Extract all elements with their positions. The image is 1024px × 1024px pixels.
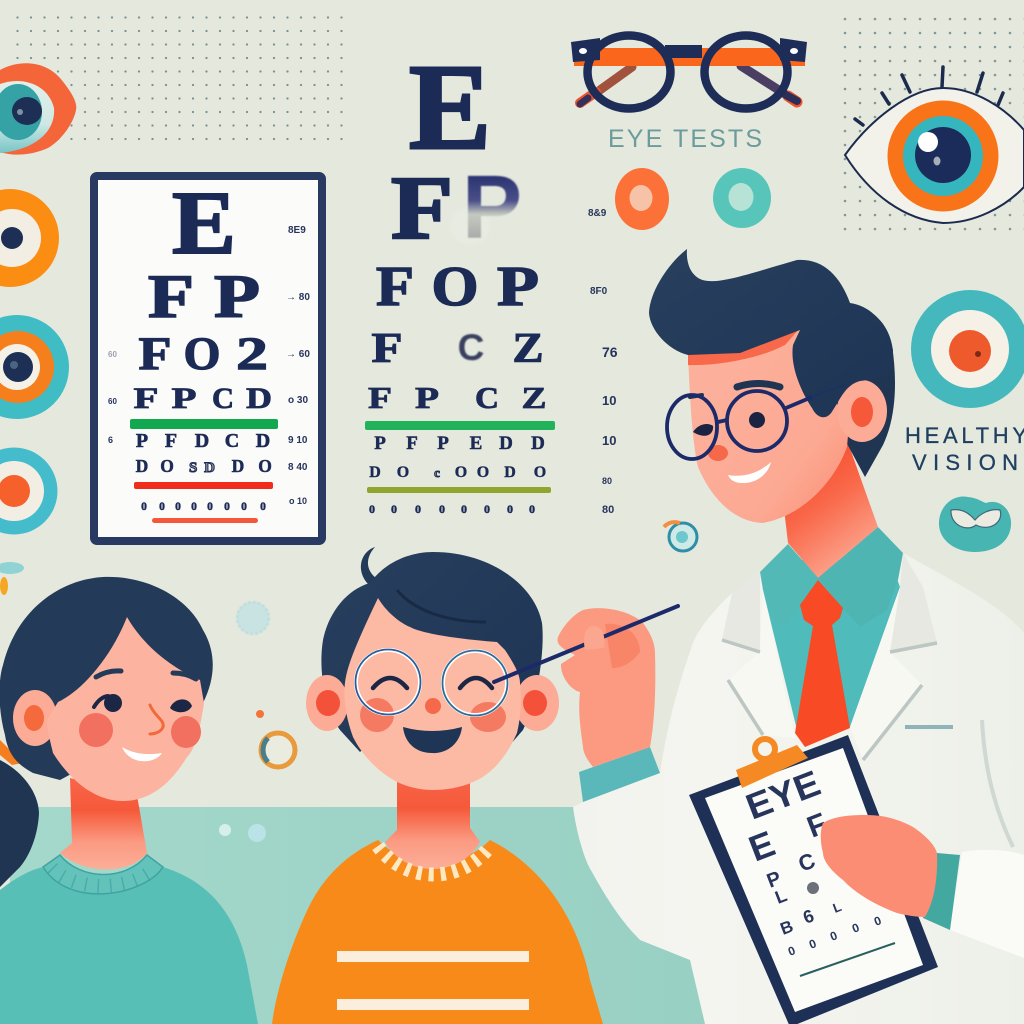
panel: eye chart on wall: C — [212, 382, 234, 415]
girl sweater — [0, 867, 258, 1024]
boy nose — [425, 698, 441, 714]
panel: free-standing eye chart: F — [406, 433, 418, 454]
boy hair sweep — [397, 590, 486, 622]
doctor back hair — [800, 305, 895, 477]
panel: free-standing eye chart: 8F0 — [590, 286, 608, 297]
panel: free-standing eye chart: 76 — [602, 344, 618, 360]
panel: free-standing eye chart: 0 — [507, 502, 513, 516]
doctor right hand — [821, 815, 937, 917]
icon: teal ring eye — [0, 315, 69, 419]
icon: small drops — [219, 824, 266, 842]
doctor pocket — [905, 725, 953, 729]
boy glasses — [356, 650, 508, 716]
clipboard text: P — [764, 867, 784, 893]
panel: free-standing eye chart: P — [437, 433, 449, 454]
panel: free-standing eye chart: E — [409, 40, 491, 175]
clipboard text — [740, 762, 884, 959]
panel: eye chart on wall: o 30 — [288, 395, 308, 406]
panel: free-standing eye chart: 0 — [369, 502, 375, 516]
icon: small orange spark — [256, 710, 264, 718]
panel: eye chart on wall: 0 — [207, 501, 213, 513]
icon: eye top left — [0, 63, 76, 155]
clipboard text: EYE — [740, 762, 826, 827]
girl ear — [13, 690, 57, 746]
doctor neck — [783, 440, 878, 578]
panel: eye chart on wall: SD — [189, 460, 215, 476]
boy hair curl — [361, 547, 376, 586]
panel: eye chart on wall: D — [256, 430, 270, 452]
clipboard text: 0 — [872, 913, 884, 929]
panel: eye chart on wall: 60 — [108, 350, 117, 359]
thumb — [584, 626, 605, 650]
panel: free-standing eye chart: F — [391, 159, 453, 258]
panel: eye chart on wall: 0 — [260, 501, 266, 513]
doctor face — [688, 310, 850, 523]
icon: side sparks — [0, 562, 24, 595]
icon: orange dot — [615, 168, 669, 230]
panel: free-standing eye chart: Z — [522, 380, 546, 415]
pointer stick — [494, 606, 678, 682]
doctor ear — [837, 380, 887, 442]
panel: free-standing eye chart: 0 — [484, 502, 490, 516]
doctor smile — [728, 462, 771, 483]
panel: free-standing eye chart: 0 — [391, 502, 397, 516]
panel: eye chart on wall: P — [136, 430, 148, 452]
panel: eye chart on wall: 0 — [241, 501, 247, 513]
panel: eye chart on wall: P — [172, 382, 196, 415]
boy collar — [378, 846, 490, 874]
panel: free-standing eye chart: 10 — [602, 393, 616, 408]
panel: free-standing eye chart: P — [497, 256, 539, 318]
panel: free-standing eye chart: C — [475, 380, 499, 415]
heading: healthy vision — [905, 423, 1024, 475]
girl smile — [122, 747, 162, 761]
doctor collar — [760, 527, 903, 627]
hand shading — [605, 624, 640, 668]
panel: free-standing eye chart: F — [376, 256, 414, 318]
panel: free-standing eye chart — [365, 40, 618, 516]
panel: free-standing eye chart: D — [369, 464, 381, 481]
doctor eyebrows — [690, 384, 780, 397]
panel: eye chart on wall: 6 — [108, 435, 113, 445]
girl hair tie — [0, 740, 23, 765]
panel: free-standing eye chart: 80 — [602, 504, 614, 516]
clipboard text: L — [772, 885, 790, 908]
boy hair — [321, 552, 543, 753]
panel: eye chart on wall: 2 — [236, 328, 268, 380]
panel: eye chart on wall — [94, 174, 322, 541]
panel: free-standing eye chart: Z — [512, 326, 544, 372]
panel: free-standing eye chart: 0 — [529, 502, 535, 516]
clipboard text: 0 — [850, 920, 862, 936]
panel: eye chart on wall: → 60 — [286, 349, 310, 360]
panel: free-standing eye chart: O — [477, 464, 489, 481]
girl neck — [60, 778, 147, 870]
panel: free-standing eye chart: C — [458, 327, 484, 368]
panel: free-standing eye chart: 80 — [602, 476, 612, 486]
panel: eye chart on wall: 60 — [108, 397, 117, 406]
doctor coat seams — [982, 720, 1013, 847]
floor — [10, 807, 710, 1024]
panel: eye chart on wall: 8 40 — [288, 462, 308, 473]
clipboard text: 0 — [807, 936, 819, 952]
panel: eye chart on wall: 0 — [141, 501, 147, 513]
panel: eye chart on wall: 0 — [159, 501, 165, 513]
girl collar — [43, 855, 163, 894]
girl nose — [150, 705, 163, 734]
doctor forehead shade — [688, 328, 800, 365]
girl blush — [79, 713, 201, 748]
clipboard text: 6 — [800, 905, 817, 928]
icon: ring — [261, 733, 295, 767]
figure: doctor — [573, 249, 1024, 1024]
panel: free-standing eye chart: O — [397, 464, 409, 481]
panel: free-standing eye chart: D — [504, 464, 516, 481]
panel: eye chart on wall: 0 — [191, 501, 197, 513]
panel: free-standing eye chart: D — [499, 433, 513, 454]
clipboard text: C — [795, 848, 819, 877]
panel: free-standing eye chart: P — [415, 380, 439, 415]
panel: eye chart on wall: E — [172, 174, 236, 273]
icon: healthy vision eye — [911, 290, 1024, 408]
doctor nose — [708, 445, 728, 461]
girl ponytail — [0, 760, 39, 887]
panel: eye chart on wall: F — [165, 430, 177, 452]
panel: eye chart on wall: D — [246, 382, 272, 415]
doctor right cuff — [923, 853, 960, 930]
icon: large eye top right — [845, 67, 1024, 223]
panel: eye chart on wall: 0 — [175, 501, 181, 513]
clipboard — [689, 735, 938, 1024]
panel: free-standing eye chart: O — [534, 464, 546, 481]
doctor right sleeve — [950, 850, 1024, 958]
panel: free-standing eye chart: E — [470, 433, 482, 454]
panel: eye chart on wall: C — [225, 430, 239, 452]
panel: eye chart on wall: F — [134, 382, 158, 415]
girl eyebrows — [96, 671, 196, 679]
panel: eye chart on wall: D — [195, 430, 209, 452]
panel: eye chart on wall: o 10 — [289, 496, 307, 506]
clipboard text: 0 — [828, 928, 840, 944]
panel: eye chart on wall: O — [160, 456, 174, 476]
girl hair back — [0, 577, 213, 780]
clipboard text: 0 — [786, 943, 798, 959]
panel: free-standing eye chart: 0 — [439, 502, 445, 516]
boy sweater stripes — [337, 951, 529, 1010]
icon: orange ring eye — [0, 189, 59, 287]
doctor sleeve cuff — [579, 747, 660, 802]
panel: eye chart on wall: D — [232, 456, 244, 476]
doctor holding hand and cuff — [821, 815, 1024, 958]
boy sweater — [272, 840, 603, 1024]
panel: eye chart on wall: 8E9 — [288, 225, 306, 236]
panel: free-standing eye chart: c — [434, 465, 440, 480]
panel: eye chart on wall: F — [138, 328, 172, 380]
clipboard text: B — [778, 917, 796, 939]
heading: healthy vision: HEALTHY — [905, 423, 1024, 448]
figure: boy — [272, 547, 603, 1024]
girl eyes — [94, 694, 192, 712]
clipboard text: E — [743, 823, 780, 869]
pointer and doctor hand — [494, 606, 678, 767]
girl face — [47, 617, 204, 801]
icon: glasses top — [571, 36, 807, 108]
doctor eyes — [693, 412, 765, 436]
panel: free-standing eye chart: 0 — [415, 502, 421, 516]
panel: eye chart on wall: P — [214, 264, 260, 331]
panel: eye chart on wall: 0 — [224, 501, 230, 513]
panel: free-standing eye chart: F — [368, 380, 392, 415]
heading: healthy vision: VISION — [912, 450, 1018, 475]
panel: free-standing eye chart: O — [455, 464, 467, 481]
boy ears — [306, 675, 559, 731]
heading: eye tests: EYE TESTS — [608, 125, 762, 153]
panel: free-standing eye chart: P — [374, 433, 386, 454]
doctor coat — [573, 553, 1024, 1024]
boy blush — [360, 698, 506, 732]
icon: small swirl — [664, 522, 697, 551]
doctor glasses — [667, 384, 846, 459]
panel: free-standing eye chart: F — [372, 326, 402, 372]
panel: eye chart on wall: O — [258, 456, 272, 476]
panel: free-standing eye chart: 8&9 — [588, 208, 607, 219]
doctor lapels — [722, 553, 937, 760]
clipboard text: L — [831, 899, 844, 916]
clipboard clip — [736, 739, 808, 788]
icon: small teal ring eye — [0, 448, 58, 534]
panel: free-standing eye chart: D — [531, 433, 545, 454]
doctor tie — [795, 580, 850, 747]
icon: teal dot — [713, 168, 771, 228]
panel: eye chart on wall: D — [136, 456, 148, 476]
icon: bubble — [237, 602, 269, 634]
panel: eye chart on wall: 9 10 — [288, 435, 308, 446]
boy mouth — [403, 727, 462, 753]
doctor hand — [557, 608, 655, 767]
doctor hair — [649, 249, 893, 417]
boy face — [344, 598, 521, 790]
figure: girl — [0, 577, 258, 1024]
clipboard text: F — [803, 807, 832, 845]
doctor shirt — [763, 560, 900, 730]
panel: free-standing eye chart: O — [432, 256, 478, 318]
panel: eye chart on wall: → 80 — [286, 292, 310, 303]
panel: eye chart on wall: O — [184, 328, 220, 380]
panel: free-standing eye chart: 0 — [461, 502, 467, 516]
panel: eye chart on wall: F — [148, 264, 194, 331]
boy eyes — [373, 678, 492, 688]
panel: free-standing eye chart: P — [462, 158, 522, 258]
boy neck — [385, 775, 480, 869]
panel: free-standing eye chart: 10 — [602, 433, 616, 448]
icon: teal blob with glasses — [939, 496, 1011, 552]
clipboard line — [800, 943, 895, 976]
